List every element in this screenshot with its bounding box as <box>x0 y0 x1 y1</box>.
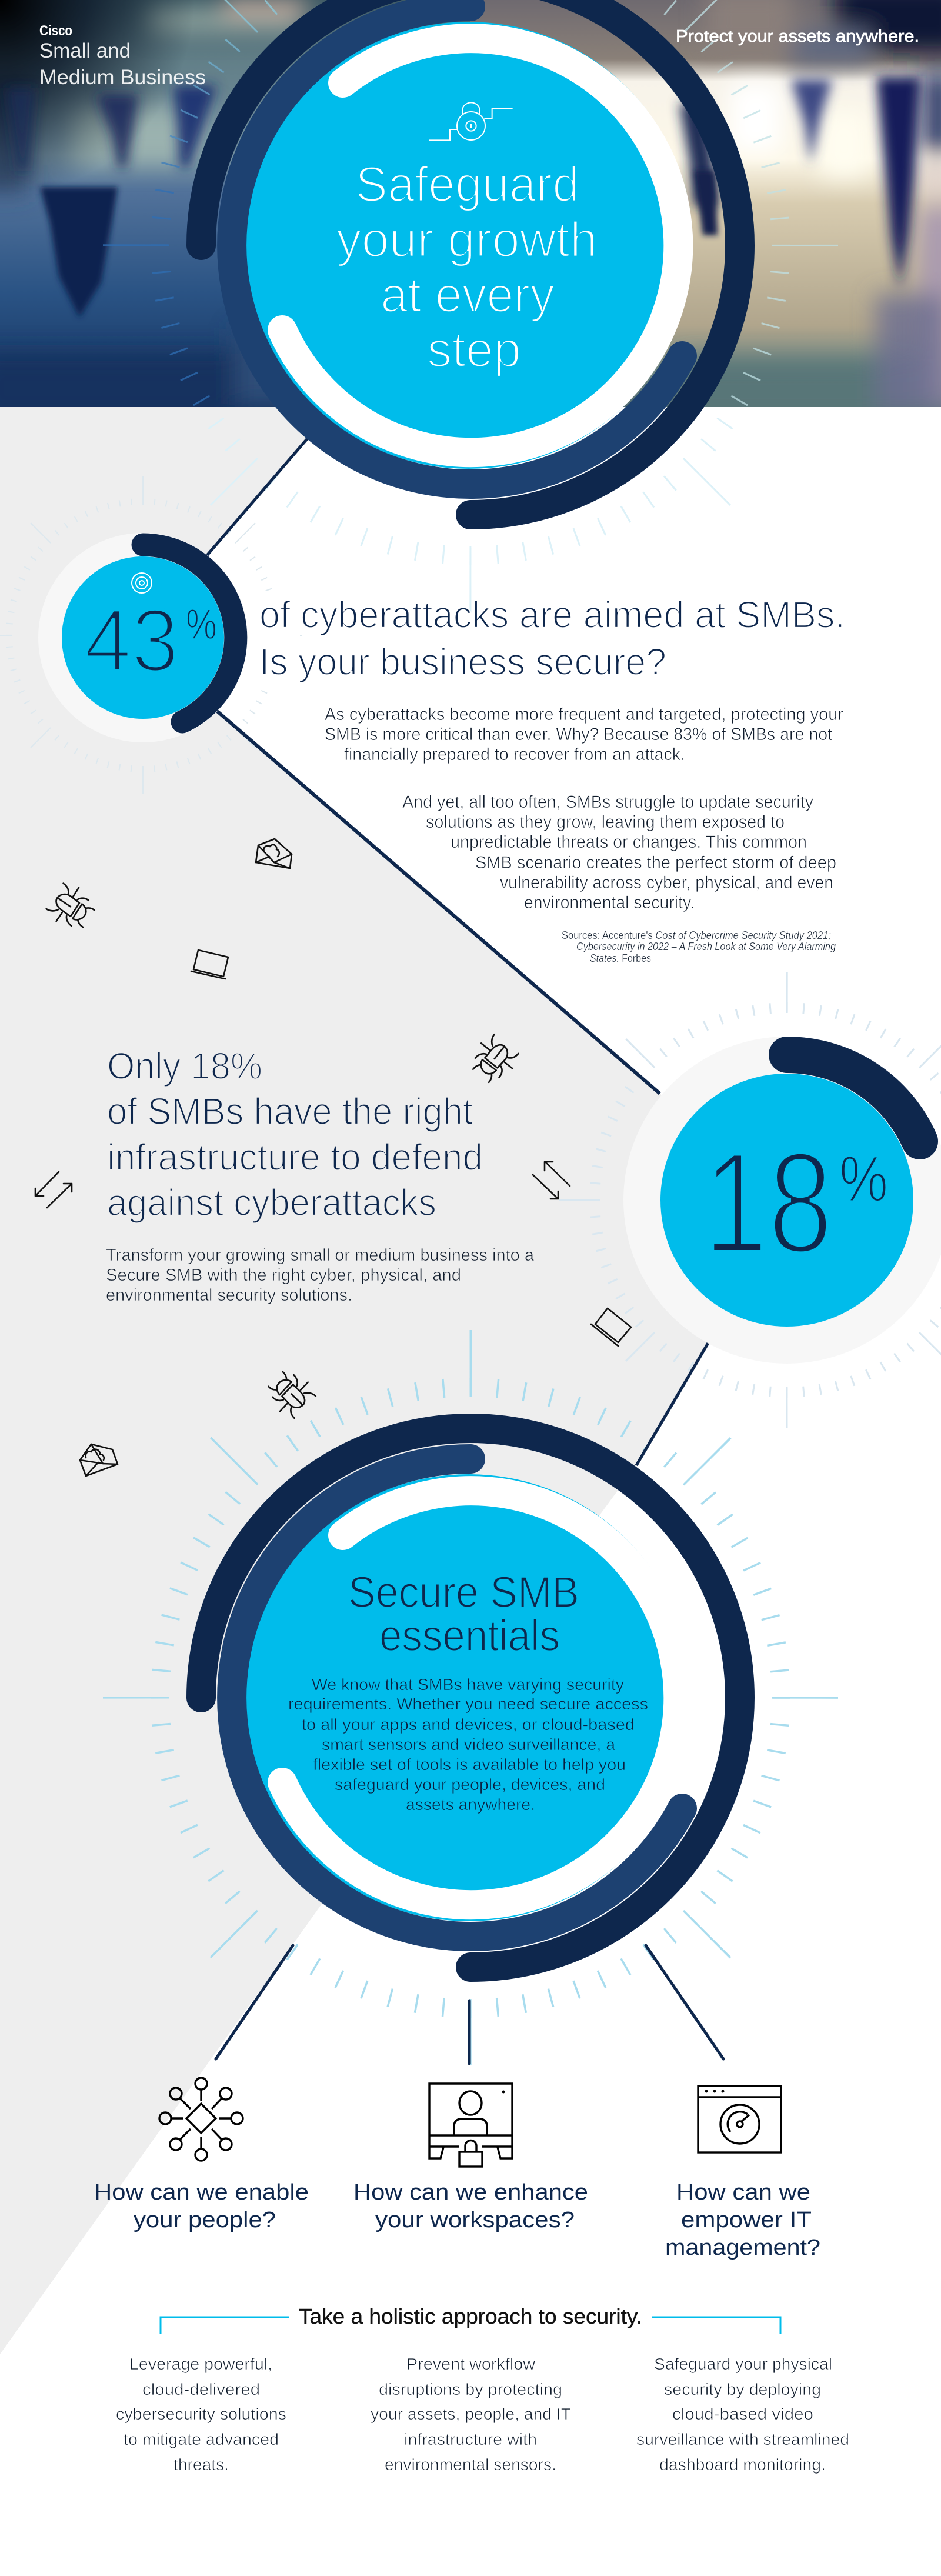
body text: essentials description: We know that SMBs have varying security <box>312 1675 624 1694</box>
connector line: 18 percent to essentials <box>636 1343 708 1465</box>
icon: bug, left <box>46 884 95 927</box>
body text: essentials description: safeguard your people, devices, and <box>335 1775 605 1794</box>
question: empower IT management: How can we <box>676 2180 810 2205</box>
heading: holistic approach: Take a holistic approach to security. <box>299 2304 642 2328</box>
tick ring: hero, over photo right <box>663 0 838 406</box>
column text: workflow: environmental sensors. <box>385 2455 556 2474</box>
question: enhance your workspaces: How can we enhance <box>353 2180 588 2205</box>
icon: target <box>132 573 152 593</box>
body text: second paragraph: solutions as they grow, leaving them exposed to <box>426 812 785 832</box>
sources note: Cybersecurity in 2022 – A Fresh Look at Some Very Alarming <box>576 940 836 952</box>
question: empower IT management: management? <box>665 2235 820 2260</box>
brand: Cisco Small and Medium Business <box>39 23 206 89</box>
18 percent stat circle <box>623 1037 941 1364</box>
heading: Secure SMB essentials <box>348 1568 579 1660</box>
hero title <box>336 156 598 377</box>
body text: second paragraph: SMB scenario creates the perfect storm of deep <box>475 853 836 872</box>
icon: bug, lower <box>263 1370 319 1421</box>
connector line: 43 percent to 18 percent <box>216 710 660 1094</box>
essentials ring graphic <box>201 1428 740 1967</box>
body text: transform your business: environmental security solutions. <box>106 1286 352 1305</box>
heading: only 18 percent <box>107 1045 483 1224</box>
body text: second paragraph <box>402 792 836 912</box>
hero ring graphic <box>201 0 740 515</box>
column text: physical security: security by deploying <box>664 2380 821 2398</box>
column text: workflow: disruptions by protecting <box>379 2380 562 2398</box>
body text: first paragraph <box>325 705 843 764</box>
heading: only 18 percent: against cyberattacks <box>107 1181 436 1224</box>
icon: transfer arrows, right <box>533 1162 570 1199</box>
column text: workflow: your assets, people, and IT <box>371 2405 571 2423</box>
heading: 43 percent of cyberattacks: of cyberattacks are aimed at SMBs. <box>259 594 845 636</box>
question: enable your people <box>94 2180 309 2232</box>
heading: Secure SMB essentials: Secure SMB <box>348 1568 579 1617</box>
brand: Cisco Small and Medium Business: Cisco <box>39 23 72 39</box>
body text: second paragraph: And yet, all too often, SMBs struggle to update security <box>402 792 813 812</box>
connector line: hero to 43 percent <box>207 434 312 555</box>
body text: first paragraph: SMB is more critical than ever. Why? Because 83% of SMBs are not <box>325 725 833 744</box>
column text: cybersecurity <box>116 2355 286 2474</box>
question: enhance your workspaces: your workspaces? <box>375 2208 575 2232</box>
grey diagonal background panel <box>0 407 787 2354</box>
icon: envelope with cloud, lower <box>80 1444 118 1476</box>
icon: bug, centre <box>472 1033 520 1085</box>
tick ring: 43 percent <box>0 491 288 780</box>
body text: second paragraph: environmental security. <box>524 893 695 912</box>
tick ring: hero, below photo <box>208 418 733 613</box>
icon: laptop, lower <box>591 1308 631 1346</box>
hero title: step <box>427 322 521 377</box>
body text: essentials description <box>288 1675 648 1814</box>
column text: physical security <box>636 2355 849 2474</box>
question: enable your people: your people? <box>134 2208 276 2232</box>
stat: 43%: 43 <box>84 591 179 691</box>
body text: essentials description: to all your apps and devices, or cloud-based <box>302 1715 635 1734</box>
column text: workflow <box>371 2355 571 2474</box>
column text: workflow: Prevent workflow <box>406 2355 536 2373</box>
tagline: Protect your assets anywhere. <box>676 27 919 46</box>
43 percent stat circle <box>38 533 248 742</box>
bracket: left <box>161 2317 289 2334</box>
column text: cybersecurity: threats. <box>173 2455 229 2474</box>
icon: envelope with cloud, upper <box>256 839 292 868</box>
hero photo: blurred commuters <box>0 0 941 424</box>
heading: only 18 percent: of SMBs have the right <box>107 1090 473 1132</box>
tick ring: hero, over photo left <box>103 0 278 406</box>
heading: 43 percent of cyberattacks <box>259 594 845 683</box>
stat: 18%: 18 <box>703 1122 833 1283</box>
tick ring: 18 percent <box>579 992 941 1408</box>
body text: first paragraph: As cyberattacks become more frequent and targeted, protecting your <box>325 705 843 724</box>
body text: second paragraph: unpredictable threats or changes. This common <box>451 832 807 852</box>
icon: network hub <box>159 2078 243 2161</box>
body text: transform your business: Secure SMB with the right cyber, physical, and <box>106 1266 461 1285</box>
column text: physical security: surveillance with streamlined <box>636 2430 849 2448</box>
icon: transfer arrows, left <box>35 1172 72 1208</box>
question: empower IT management: empower IT <box>681 2208 812 2232</box>
question: empower IT management <box>665 2180 820 2260</box>
bracket: right <box>652 2317 780 2334</box>
icon: laptop, upper <box>191 950 228 979</box>
icon: padlock on steps <box>429 102 513 140</box>
sources note: Sources: Accenture's Cost of Cybercrime Security Study 2021; <box>562 929 831 941</box>
heading: only 18 percent: Only 18% <box>107 1045 262 1087</box>
question: enable your people: How can we enable <box>94 2180 309 2205</box>
branch lines to three questions <box>216 1945 723 2064</box>
icon: dashboard gauge <box>698 2086 781 2152</box>
heading: Secure SMB essentials: essentials <box>379 1611 560 1660</box>
brand: Cisco Small and Medium Business: Medium Business <box>39 66 206 89</box>
question: enhance your workspaces <box>353 2180 588 2232</box>
column text: cybersecurity: cybersecurity solutions <box>116 2405 286 2423</box>
stat: 18%: % <box>839 1143 888 1215</box>
column text: workflow: infrastructure with <box>404 2430 537 2448</box>
stat: 43%: % <box>186 601 217 648</box>
body text: essentials description: flexible set of tools is available to help you <box>313 1755 626 1774</box>
heading: only 18 percent: infrastructure to defend <box>107 1136 483 1178</box>
column text: physical security: Safeguard your physical <box>654 2355 832 2373</box>
body text: second paragraph: vulnerability across cyber, physical, and even <box>500 873 833 892</box>
body text: essentials description: assets anywhere. <box>406 1795 535 1814</box>
hero title: your growth <box>336 212 598 267</box>
body text: essentials description: smart sensors and video surveillance, a <box>322 1735 615 1754</box>
tick clear zone beside headline <box>253 591 300 688</box>
heading: 43 percent of cyberattacks: Is your business secure? <box>259 641 666 683</box>
tick ring: secure SMB essentials <box>135 1362 806 2033</box>
body text: transform your business <box>106 1246 535 1305</box>
column text: physical security: dashboard monitoring. <box>659 2455 826 2474</box>
column text: cybersecurity: to mitigate advanced <box>124 2430 279 2448</box>
body text: first paragraph: financially prepared to recover from an attack. <box>344 745 685 764</box>
body text: transform your business: Transform your growing small or medium business into a <box>106 1246 535 1265</box>
column text: cybersecurity: cloud-delivered <box>142 2380 260 2398</box>
brand: Cisco Small and Medium Business: Small and <box>39 39 131 62</box>
icon: workspace person with lock <box>429 2084 512 2167</box>
hero title: at every <box>381 267 555 322</box>
hero title: Safeguard <box>355 156 579 212</box>
column text: cybersecurity: Leverage powerful, <box>129 2355 272 2373</box>
body text: essentials description: requirements. Whether you need secure access <box>288 1695 648 1713</box>
sources note: States. Forbes <box>590 952 651 964</box>
sources note <box>562 929 836 964</box>
column text: physical security: cloud-based video <box>672 2405 813 2423</box>
